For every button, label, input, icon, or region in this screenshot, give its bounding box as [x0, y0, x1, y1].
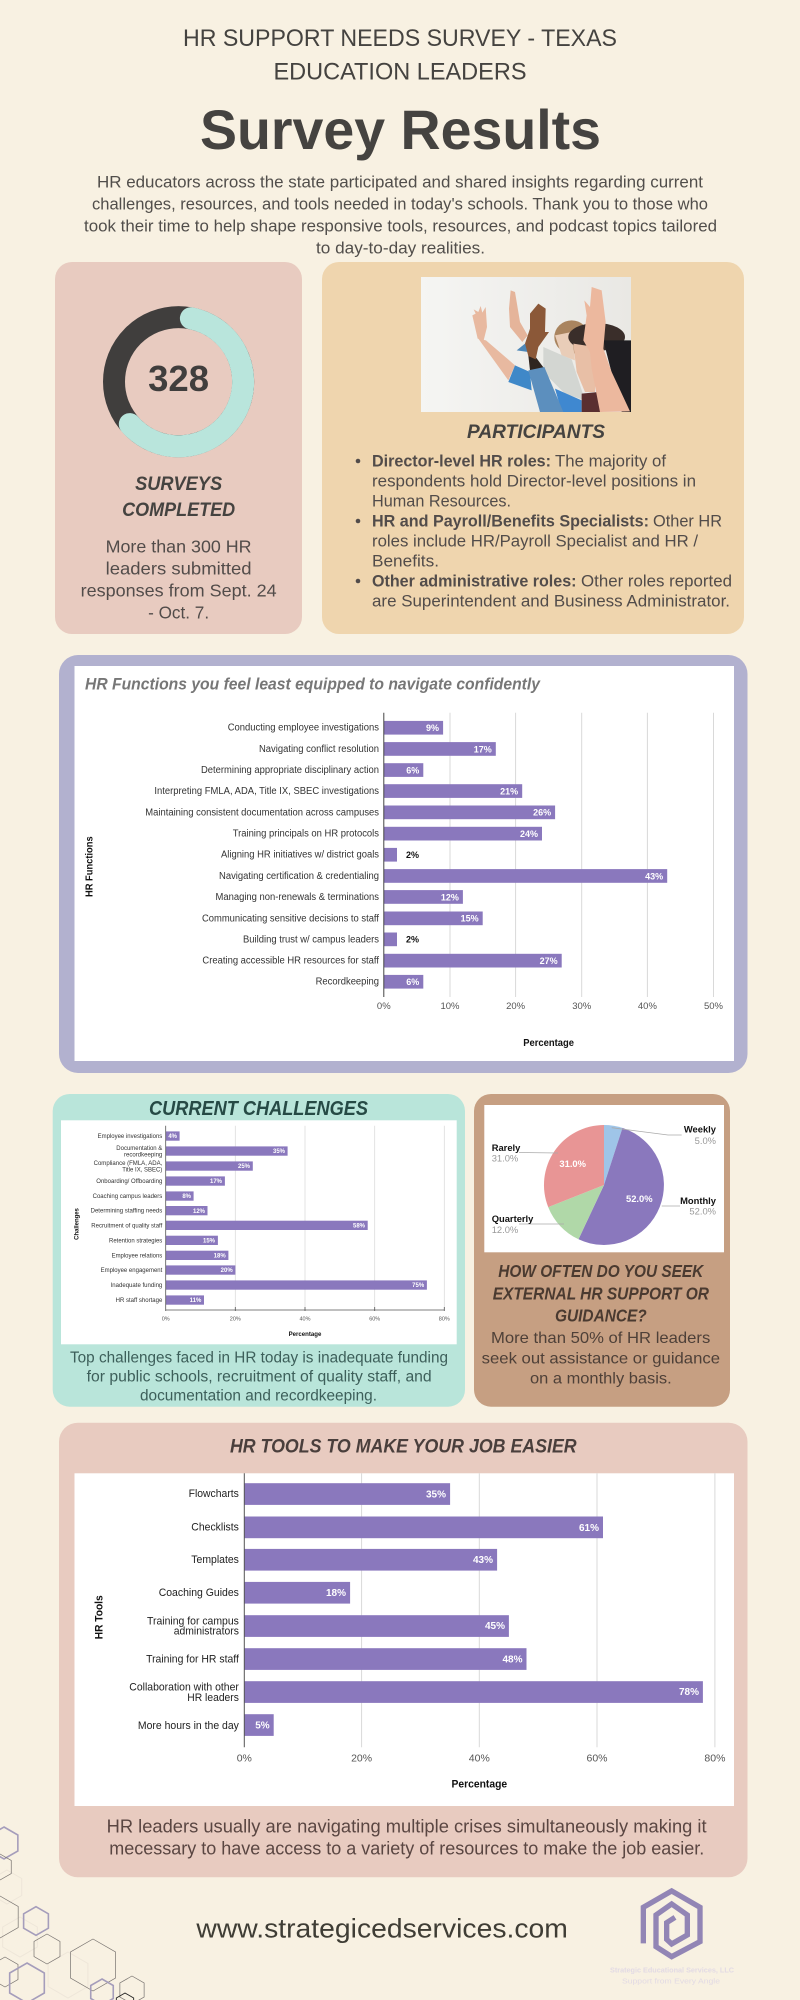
bar chart: HR functions: Creating accessible HR resources for staff: [202, 956, 379, 967]
intro paragraph: [84, 174, 717, 258]
caption: HR tools: [107, 1816, 707, 1858]
bar chart: HR tools: Training for HR staff: [146, 1654, 240, 1666]
heading: surveys completed: COMPLETED: [122, 499, 235, 521]
bar chart: HR tools: Coaching Guides: [159, 1587, 239, 1599]
photo: raised hands illustration: [421, 277, 632, 412]
bar chart: HR functions: 2%: [406, 935, 419, 945]
bar chart: HR functions: 6%: [406, 977, 419, 987]
text: response summary: [81, 536, 277, 622]
panel: participants: [322, 262, 744, 634]
text: monthly assistance summary: on a monthly basis.: [530, 1370, 672, 1387]
bar chart: HR functions: Navigating certification & credentialing: [219, 871, 379, 882]
bar chart: HR functions: 2%: [406, 850, 419, 860]
heading: HR tools: HR TOOLS TO MAKE YOUR JOB EASIER: [230, 1436, 577, 1457]
title: survey name: [183, 25, 617, 86]
pie chart: support frequency: Rarely: [492, 1142, 521, 1153]
icon: spiral hexagon: [643, 1891, 700, 1957]
bar chart: HR tools: 48%: [502, 1654, 523, 1666]
pie chart: support frequency: Weekly: [684, 1124, 717, 1134]
bar chart: HR functions: 24%: [520, 829, 538, 839]
bar chart: HR tools: 0%: [237, 1752, 252, 1764]
bar chart: challenges: Challenges: [74, 1208, 81, 1240]
bar chart: HR tools: 18%: [326, 1588, 346, 1599]
heading: current challenges: CURRENT CHALLENGES: [149, 1097, 368, 1120]
bar chart: HR functions: Training principals on HR protocols: [233, 829, 379, 840]
chart title: HR Functions you feel least equipped to navigate confidently: [85, 676, 541, 694]
panel: HR tools: [59, 1423, 748, 1877]
bar chart: HR functions: 43%: [645, 871, 663, 881]
heading: how often do you seek support: [493, 1261, 709, 1325]
bar chart: HR tools: 61%: [579, 1523, 599, 1534]
bullet list: participant roles: Other roles reported: [581, 572, 732, 590]
panel: current challenges: [53, 1094, 465, 1407]
bar chart: HR functions: 15%: [461, 914, 479, 924]
bar chart: HR functions: Navigating conflict resolution: [259, 744, 379, 755]
bullet list: participant roles: Director-level HR roles:: [372, 452, 551, 470]
bar chart: challenges: Documentation &: [116, 1145, 163, 1152]
bar chart: challenges: 20%: [221, 1268, 233, 1274]
bar chart: challenges: recordkeeping: [124, 1152, 163, 1158]
bar chart: HR tools: 60%: [586, 1752, 608, 1764]
bar chart: HR functions: 27%: [540, 956, 558, 966]
heading: surveys completed: [122, 473, 235, 521]
bar chart: HR functions: Aligning HR initiatives w/ district goals: [221, 850, 379, 861]
text: response summary: More than 300 HR: [106, 536, 252, 556]
bullet list: participant roles: roles include HR/Payroll Specialist and HR /: [372, 532, 698, 550]
heading: surveys completed: SURVEYS: [135, 473, 222, 495]
heading: how often do you seek support: HOW OFTEN DO YOU SEEK: [498, 1261, 704, 1281]
bar chart: challenges: 18%: [214, 1254, 226, 1260]
bar chart: HR functions: Interpreting FMLA, ADA, Title IX, SBEC investigations: [154, 786, 379, 797]
bullet list: participant roles: respondents hold Director-level positions in: [372, 472, 696, 490]
bar chart: HR functions: Percentage: [523, 1038, 574, 1049]
title: survey name: EDUCATION LEADERS: [274, 58, 526, 86]
heading: Survey Results: Survey Results: [200, 98, 601, 161]
bar chart: HR tools: Flowcharts: [189, 1488, 239, 1500]
bar chart: challenges: HR staff shortage: [116, 1297, 163, 1304]
heading: how often do you seek support: EXTERNAL HR SUPPORT OR: [493, 1283, 709, 1303]
bar chart: challenges: Employee investigations: [98, 1133, 163, 1140]
bar chart: HR tools: 5%: [255, 1720, 270, 1732]
text: monthly assistance summary: seek out assistance or guidance: [482, 1350, 720, 1367]
bar chart: HR functions: 17%: [474, 744, 492, 754]
bar chart: HR functions: 30%: [572, 1001, 592, 1012]
bar chart: challenges: 15%: [203, 1238, 216, 1244]
pie chart: support frequency: [492, 1124, 717, 1245]
logo text: [610, 1968, 734, 1986]
bar chart: HR functions: 50%: [704, 1001, 724, 1012]
bar chart: challenges: 8%: [182, 1194, 192, 1200]
bar chart: challenges: Compliance (FMLA, ADA,: [94, 1160, 162, 1167]
bar chart: HR tools: Percentage: [451, 1778, 507, 1790]
bar chart: HR tools: 78%: [679, 1687, 699, 1698]
bar chart: challenges: 58%: [353, 1224, 366, 1230]
pie chart: support frequency: 5.0%: [695, 1135, 716, 1146]
bar chart: HR tools: administrators: [174, 1626, 239, 1638]
intro paragraph: took their time to help shape responsive tools, resources, and podcast topics tailored: [84, 218, 717, 236]
bullet list: participant roles: Human Resources.: [372, 492, 511, 510]
bar chart: HR tools: More hours in the day: [138, 1720, 239, 1732]
bar chart: challenges: Inadequate funding: [111, 1282, 163, 1289]
intro paragraph: to day-to-day realities.: [316, 240, 485, 258]
bar chart: challenges: Percentage: [289, 1331, 322, 1338]
bar chart: challenges: Title IX, SBEC): [122, 1166, 162, 1174]
bar chart: HR functions: 0%: [377, 1001, 391, 1012]
text: response summary: leaders submitted: [106, 558, 252, 578]
bar chart: challenges: 80%: [439, 1317, 450, 1323]
panel: external support frequency: [474, 1094, 730, 1407]
pie chart: support frequency: 31.0%: [559, 1158, 587, 1169]
bar chart: challenges: 60%: [369, 1317, 380, 1323]
bar chart: HR tools: 80%: [704, 1752, 725, 1764]
bar chart: HR functions: HR Functions: [84, 836, 96, 897]
pie chart: support frequency: 31.0%: [492, 1152, 518, 1164]
title: survey name: HR SUPPORT NEEDS SURVEY - TEXAS: [183, 25, 617, 52]
website url: www.strategicedservices.com: [195, 1913, 568, 1943]
bar chart: challenges: 25%: [238, 1164, 251, 1170]
bar chart: HR tools: 35%: [426, 1490, 446, 1500]
bar chart: challenges: 4%: [168, 1134, 178, 1140]
text: response summary: responses from Sept. 24: [81, 580, 277, 600]
bullet list: participant roles: Benefits.: [372, 552, 439, 570]
donut chart: 328 surveys: 328: [148, 358, 209, 399]
intro paragraph: challenges, resources, and tools needed in today's schools. Thank you to those who: [92, 196, 708, 214]
text: monthly assistance summary: [482, 1330, 720, 1387]
bar chart: challenges: [74, 1126, 450, 1338]
text: response summary: - Oct. 7.: [148, 602, 209, 622]
bar chart: HR functions: 10%: [440, 1001, 460, 1012]
pie chart: support frequency: Quarterly: [492, 1213, 534, 1224]
pie chart: support frequency: 52.0%: [689, 1206, 716, 1216]
bar chart: challenges: 12%: [193, 1209, 206, 1215]
intro paragraph: HR educators across the state participated and shared insights regarding current: [97, 174, 703, 192]
bar chart: HR functions: 6%: [406, 765, 419, 775]
heading: participants: PARTICIPANTS: [467, 421, 605, 443]
logo text: Support from Every Angle: [622, 1978, 720, 1986]
bar chart: HR tools: HR leaders: [187, 1692, 239, 1704]
bar chart: challenges: Employee engagement: [101, 1267, 162, 1274]
bar chart: challenges: Determining staffing needs: [91, 1208, 163, 1215]
bullet list: participant roles: [356, 452, 732, 610]
caption: top challenges: [70, 1350, 448, 1404]
bar chart: HR functions: Determining appropriate disciplinary action: [201, 765, 379, 776]
bar chart: HR functions: Conducting employee investigations: [228, 723, 379, 734]
pie chart: support frequency: 52.0%: [626, 1193, 653, 1204]
bar chart: HR tools: 45%: [485, 1621, 505, 1632]
bar chart: HR tools: Templates: [191, 1554, 239, 1566]
bar chart: HR functions: [84, 713, 724, 1049]
bar chart: HR functions: 21%: [500, 786, 518, 796]
panel: surveys completed: [55, 262, 302, 634]
bar chart: HR tools: Training for campus: [147, 1616, 239, 1628]
caption: HR tools: HR leaders usually are navigating multiple crises simultaneously making it: [107, 1816, 707, 1836]
caption: top challenges: documentation and recordkeeping.: [140, 1388, 377, 1404]
bar chart: HR tools: Collaboration with other: [129, 1682, 239, 1694]
bullet list: participant roles: The majority of: [555, 452, 666, 470]
text: monthly assistance summary: More than 50% of HR leaders: [491, 1330, 710, 1347]
bar chart: challenges: 0%: [162, 1317, 170, 1323]
bar chart: challenges: Onboarding/ Offboarding: [96, 1178, 163, 1185]
bar chart: HR tools: Checklists: [191, 1521, 239, 1533]
bar chart: HR functions: 12%: [441, 892, 459, 902]
bar chart: HR tools: 43%: [473, 1555, 493, 1566]
bar chart: HR functions: 40%: [638, 1001, 657, 1012]
bar chart: HR tools: 20%: [351, 1752, 372, 1764]
bar chart: HR functions: Recordkeeping: [316, 977, 379, 988]
bar chart: challenges: 20%: [230, 1317, 241, 1323]
bar chart: HR functions: Maintaining consistent documentation across campuses: [145, 807, 379, 818]
bar chart: HR functions: 20%: [506, 1001, 526, 1012]
bar chart: HR functions: 9%: [426, 723, 439, 733]
bar chart: HR functions: Managing non-renewals & terminations: [216, 892, 379, 903]
header: [84, 25, 717, 258]
bar chart: challenges: 75%: [412, 1283, 425, 1289]
bar chart: challenges: Recruitment of quality staff: [91, 1222, 162, 1229]
bar chart: HR tools: 40%: [469, 1752, 490, 1764]
caption: HR tools: mecessary to have access to a variety of resources to make the job easier.: [109, 1838, 704, 1858]
bar chart: challenges: Retention strategies: [109, 1237, 163, 1244]
decorative hexagon pattern: [0, 1827, 144, 2000]
logo text: Strategic Educational Services, LLC: [610, 1968, 734, 1974]
caption: top challenges: for public schools, recruitment of quality staff, and: [87, 1368, 432, 1386]
bar chart: HR functions: Communicating sensitive decisions to staff: [202, 913, 379, 924]
bar chart: HR functions: 26%: [533, 808, 551, 818]
bar chart: HR functions: Building trust w/ campus leaders: [243, 934, 379, 945]
donut chart: 328 surveys: [114, 317, 243, 446]
pie chart: support frequency: Monthly: [680, 1195, 717, 1206]
bar chart: challenges: Coaching campus leaders: [93, 1193, 163, 1200]
bar chart: challenges: Employee relations: [112, 1252, 163, 1259]
bar chart: challenges: 35%: [273, 1149, 286, 1155]
bar chart: HR tools: [94, 1473, 725, 1790]
logo: Strategic Educational Services: [610, 1891, 734, 1986]
bar chart: HR tools: HR Tools: [94, 1595, 106, 1639]
caption: top challenges: Top challenges faced in HR today is inadequate funding: [70, 1350, 448, 1366]
bullet list: participant roles: Other HR: [653, 512, 722, 530]
bullet list: participant roles: HR and Payroll/Benefits Specialists:: [372, 512, 649, 530]
bar chart: challenges: 17%: [210, 1179, 223, 1185]
bar chart: challenges: 11%: [190, 1298, 202, 1304]
bar chart: challenges: 40%: [299, 1317, 311, 1323]
panel: HR functions chart: [59, 655, 748, 1073]
bullet list: participant roles: Other administrative roles:: [372, 572, 576, 590]
heading: how often do you seek support: GUIDANCE?: [555, 1305, 647, 1325]
pie chart: support frequency: 12.0%: [492, 1224, 518, 1235]
bullet list: participant roles: are Superintendent and Business Administrator.: [372, 592, 730, 610]
